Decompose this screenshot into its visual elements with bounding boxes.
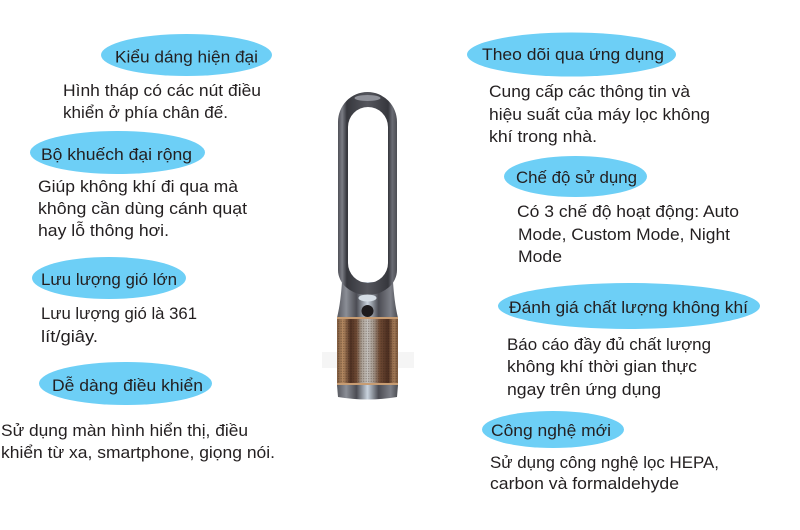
neck highlight — [358, 294, 376, 302]
description: Sử dụng công nghệ lọc HEPA, — [490, 453, 719, 472]
description: Có 3 chế độ hoạt động: Auto — [517, 202, 739, 221]
description — [63, 81, 261, 122]
heading: Đánh giá chất lượng không khí — [509, 298, 748, 317]
copper filter body — [337, 317, 398, 385]
panel: Chế độ sử dụng — [504, 156, 739, 266]
description: Mode — [518, 247, 562, 266]
heading pill — [32, 257, 186, 299]
description — [1, 421, 275, 462]
heading pill — [498, 283, 760, 329]
heading: Bộ khuếch đại rộng — [41, 145, 192, 164]
description: Giúp không khí đi qua mà — [38, 177, 239, 196]
description — [38, 177, 247, 240]
fan loop amplifier — [338, 92, 397, 295]
description: hay lỗ thông hơi. — [38, 221, 169, 240]
description: carbon và formaldehyde — [490, 474, 679, 493]
panel: Lưu lượng gió lớn — [32, 257, 197, 346]
description: Hình tháp có các nút điều — [63, 81, 261, 100]
heading pill — [482, 411, 624, 448]
control button — [362, 305, 374, 317]
heading pill — [39, 362, 212, 405]
panel: Đánh giá chất lượng không khí — [498, 283, 760, 399]
loop top highlight — [354, 95, 380, 101]
faint floor reflection band — [322, 352, 414, 368]
heading: Chế độ sử dụng — [516, 168, 637, 187]
panel: Dễ dàng điều khiển — [1, 362, 275, 462]
panel: Kiểu dáng hiện đại — [63, 34, 272, 122]
heading pill — [467, 32, 676, 76]
description: khí trong nhà. — [489, 127, 597, 146]
metal base — [337, 385, 398, 400]
fan neck — [337, 282, 398, 318]
description — [517, 202, 739, 266]
heading: Kiểu dáng hiện đại — [115, 48, 258, 67]
heading pill — [101, 34, 272, 76]
panel: Công nghệ mới — [482, 411, 719, 493]
heading: Lưu lượng gió lớn — [41, 270, 177, 289]
description: Mode, Custom Mode, Night — [518, 225, 730, 244]
heading: Dễ dàng điều khiển — [52, 376, 203, 395]
description: ngay trên ứng dụng — [507, 380, 661, 399]
description: Báo cáo đầy đủ chất lượng — [507, 335, 711, 354]
description: Lưu lượng gió là 361 — [41, 304, 197, 323]
heading pill — [30, 131, 205, 174]
description — [507, 335, 711, 399]
description — [489, 82, 710, 146]
description: khiển ở phía chân đế. — [63, 103, 228, 122]
description: Sử dụng màn hình hiển thị, điều — [1, 421, 248, 440]
panel: Bộ khuếch đại rộng — [30, 131, 247, 240]
description: khiển từ xa, smartphone, giọng nói. — [1, 443, 275, 462]
description: lít/giây. — [41, 327, 98, 346]
description: không khí thời gian thực — [507, 357, 698, 376]
image: air purifier tower fan — [322, 92, 414, 400]
description: Cung cấp các thông tin và — [489, 82, 691, 101]
description — [490, 453, 719, 493]
panel: Theo dõi qua ứng dụng — [467, 32, 710, 146]
heading: Theo dõi qua ứng dụng — [482, 45, 664, 64]
description: không cần dùng cánh quạt — [38, 199, 247, 218]
heading: Công nghệ mới — [491, 421, 611, 440]
description — [41, 304, 197, 346]
description: hiệu suất của máy lọc không — [489, 105, 710, 124]
heading pill — [504, 156, 647, 197]
